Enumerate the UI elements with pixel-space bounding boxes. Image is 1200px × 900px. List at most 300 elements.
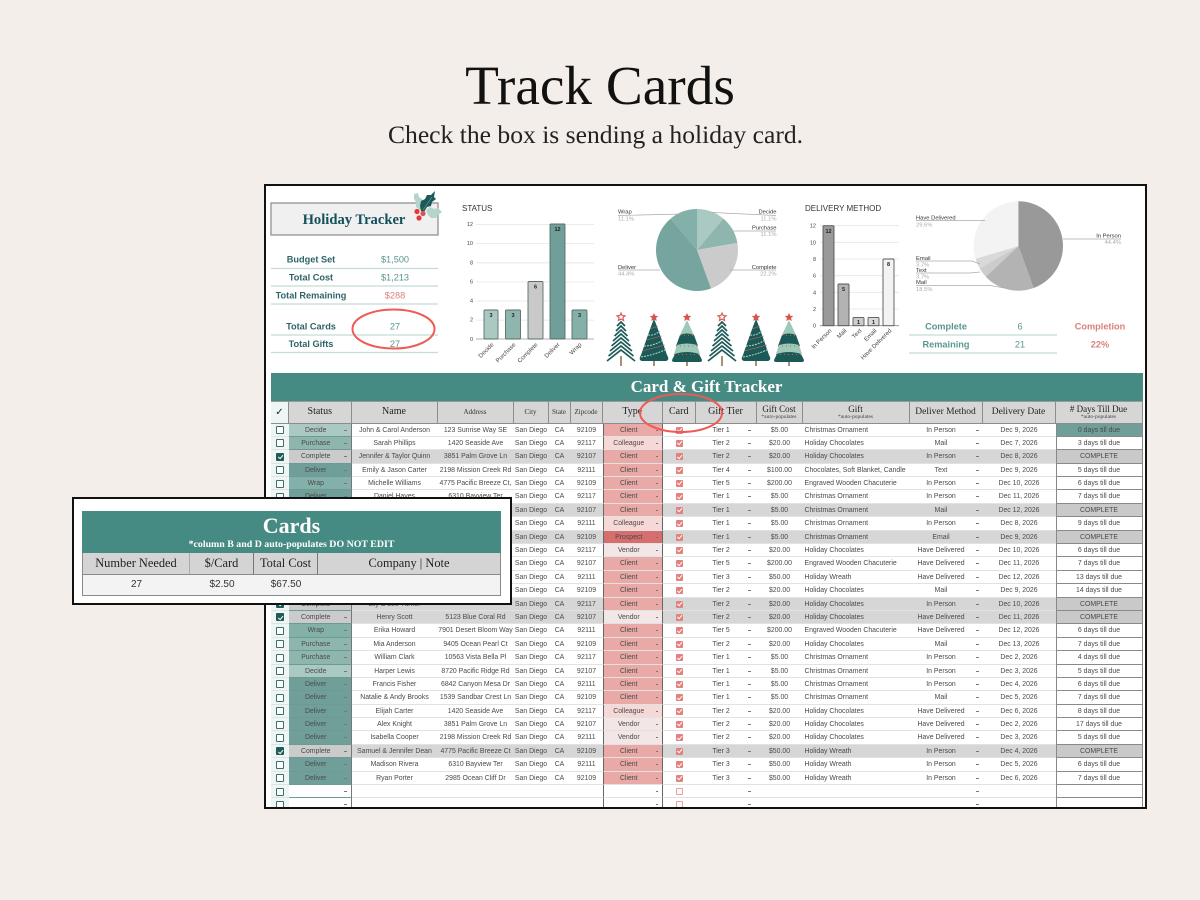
row 17: $20.00 xyxy=(769,641,790,648)
row 25: Dec 4, 2026 xyxy=(1000,748,1038,755)
row 22: 8 days till due xyxy=(1078,708,1120,715)
stats: completion: Remaining xyxy=(923,340,969,350)
row 11: Have Delivered xyxy=(917,560,965,567)
row 5: Wrap xyxy=(308,480,324,487)
row 23: Vendor xyxy=(618,721,640,728)
pie chart: delivery method: 18.5% xyxy=(916,287,932,293)
bar chart: delivery method: 12 xyxy=(810,224,816,230)
row 23 xyxy=(271,718,1143,731)
row 25: In Person xyxy=(926,748,956,755)
row 25: 4775 Pacific Breeze Ct xyxy=(440,748,511,755)
row 8: Colleague xyxy=(613,520,644,527)
row 5: Client xyxy=(620,480,638,487)
cards table xyxy=(82,553,501,596)
pie chart: delivery method: 3.7% xyxy=(916,262,929,268)
bar chart: status: 3 xyxy=(511,313,515,319)
row 11: 92107 xyxy=(577,560,596,567)
row 21: Tier 1 xyxy=(712,694,730,701)
row 20: CA xyxy=(555,681,564,688)
row 26: $50.00 xyxy=(769,761,790,768)
row 14: Tier 2 xyxy=(712,601,730,608)
row 5 xyxy=(271,477,1143,490)
table header: Gift Cost xyxy=(762,404,796,414)
table header: Name xyxy=(382,406,406,417)
row 21: Natalie & Andy Brooks xyxy=(360,694,429,701)
row 15 xyxy=(271,611,1143,624)
row 8: San Diego xyxy=(515,520,547,527)
row 23: CA xyxy=(555,721,564,728)
row 9: Dec 9, 2026 xyxy=(1000,534,1038,541)
row 22: Elijah Carter xyxy=(376,708,413,715)
row 2: Sarah Phillips xyxy=(373,440,416,447)
row 9: CA xyxy=(555,534,564,541)
row 7: Dec 12, 2026 xyxy=(998,507,1040,514)
row 16: 6 days till due xyxy=(1078,627,1120,634)
row 27: 92109 xyxy=(577,775,596,782)
row 22: 1420 Seaside Ave xyxy=(448,708,503,715)
table header: Address xyxy=(464,408,486,416)
summary: budget and totals: $288 xyxy=(385,290,405,300)
row 3: Client xyxy=(620,453,638,460)
row 7: Christmas Ornament xyxy=(804,507,868,514)
row 22: $20.00 xyxy=(769,708,790,715)
row 17: CA xyxy=(555,641,564,648)
row 16: $200.00 xyxy=(767,627,792,634)
row 5: 4775 Pacific Breeze Ct, xyxy=(439,480,512,487)
row 14: Client xyxy=(620,601,638,608)
row 12: San Diego xyxy=(515,574,547,581)
row 18: 4 days till due xyxy=(1078,654,1120,661)
row 27: San Diego xyxy=(515,775,547,782)
row 22: San Diego xyxy=(515,708,547,715)
row 18: Purchase xyxy=(301,654,330,661)
row 3 xyxy=(271,450,1143,464)
row 11: $200.00 xyxy=(767,560,792,567)
row 13 xyxy=(271,584,1143,598)
row 5: Engraved Wooden Chacuterie xyxy=(804,480,897,487)
summary: budget and totals: Total Gifts xyxy=(289,339,333,349)
bar chart: delivery method: Mail xyxy=(836,328,848,340)
row 1: Dec 9, 2026 xyxy=(1000,426,1038,434)
row 13: CA xyxy=(555,587,564,594)
row 14: COMPLETE xyxy=(1080,601,1118,608)
row 9 xyxy=(271,531,1143,544)
row 15: 92107 xyxy=(577,614,596,621)
row 10: CA xyxy=(555,547,564,554)
table header: State xyxy=(552,408,566,416)
row 27: Deliver xyxy=(305,775,326,782)
row 3: Complete xyxy=(301,453,330,460)
row 24: Vendor xyxy=(618,734,640,741)
cards table: $/Card xyxy=(205,556,238,570)
row 6: CA xyxy=(555,493,564,500)
row 21: $5.00 xyxy=(771,694,788,701)
row 5: Tier 5 xyxy=(712,480,730,487)
row 15: CA xyxy=(555,614,564,621)
pie chart: status: Decide xyxy=(758,210,776,216)
bar chart: delivery method: Email xyxy=(864,328,878,343)
bar chart: status: 4 xyxy=(470,298,473,304)
row 25: San Diego xyxy=(515,748,547,755)
table header: Delivery Date xyxy=(992,406,1045,416)
row 20: Deliver xyxy=(305,681,326,688)
row 23: Dec 2, 2026 xyxy=(1000,721,1038,728)
row 10: $20.00 xyxy=(769,547,790,554)
row 15: $20.00 xyxy=(769,614,790,621)
row 16: Client xyxy=(620,627,638,634)
row 19: In Person xyxy=(926,668,956,675)
table header xyxy=(271,401,1143,424)
row 4: Text xyxy=(935,467,947,474)
table header: Zipcode xyxy=(575,408,597,416)
row 6: Tier 1 xyxy=(712,493,730,500)
row 12: Dec 12, 2026 xyxy=(998,574,1040,581)
row 24: Isabella Cooper xyxy=(370,734,419,741)
row 18 xyxy=(271,651,1143,665)
row 2: Tier 2 xyxy=(712,440,730,447)
row 10: Have Delivered xyxy=(917,547,965,554)
row 7: Mail xyxy=(935,507,947,514)
row 19: 8720 Pacific Ridge Rd xyxy=(441,668,510,675)
row 24: Holiday Chocolates xyxy=(804,734,864,741)
row 8: In Person xyxy=(926,520,956,527)
row 15: Complete xyxy=(301,614,330,621)
bar chart: status: Complete xyxy=(517,342,540,365)
table header: Gift Tier xyxy=(708,406,743,417)
row 19: CA xyxy=(555,668,564,675)
row 12: Tier 3 xyxy=(712,574,730,581)
row 5: In Person xyxy=(926,480,956,487)
row 16: Tier 5 xyxy=(712,627,730,634)
row 18: Dec 2, 2026 xyxy=(1000,654,1038,661)
bar chart: delivery method: 1 xyxy=(872,320,875,326)
pie chart: status: Wrap xyxy=(618,210,632,216)
row 5: CA xyxy=(555,480,564,487)
row 22: Dec 6, 2026 xyxy=(1000,708,1038,715)
row 6: Client xyxy=(620,493,638,500)
row 24: 92111 xyxy=(577,734,596,741)
row 21: 92109 xyxy=(577,694,596,701)
row 3: Holiday Chocolates xyxy=(804,453,864,460)
row 5: Michelle Williams xyxy=(368,480,421,487)
row 11: CA xyxy=(555,560,564,567)
row 1: Decide xyxy=(305,426,326,434)
row 25: Samuel & Jennifer Dean xyxy=(357,748,432,755)
row 2: San Diego xyxy=(515,440,547,447)
row 20: Christmas Ornament xyxy=(804,681,868,688)
pie chart: delivery method: In Person xyxy=(1096,234,1121,240)
row 25: Holiday Wreath xyxy=(804,748,851,755)
bar chart: delivery method: 8 xyxy=(887,262,890,268)
row 17: 7 days till due xyxy=(1078,641,1120,648)
row 3: $20.00 xyxy=(769,453,790,460)
row 1: Client xyxy=(620,426,638,434)
row 19: Christmas Ornament xyxy=(804,668,868,675)
pie chart: delivery method: Mail xyxy=(916,280,927,286)
row 4: 92111 xyxy=(577,467,596,474)
row 11: Tier 5 xyxy=(712,560,730,567)
row 8: 9 days till due xyxy=(1078,520,1120,527)
row 19 xyxy=(271,665,1143,678)
bar chart: status: 6 xyxy=(470,280,473,286)
row 26: Dec 5, 2026 xyxy=(1000,761,1038,768)
row 8: Tier 1 xyxy=(712,520,730,527)
row 24: Deliver xyxy=(305,734,326,741)
row 11 xyxy=(271,557,1143,571)
row 6 xyxy=(271,490,1143,504)
row 24: Dec 3, 2026 xyxy=(1000,734,1038,741)
summary: budget and totals: 27 xyxy=(390,339,400,349)
row 18: Tier 1 xyxy=(712,654,730,661)
row 2: Holiday Chocolates xyxy=(804,440,864,447)
row 4: 2198 Mission Creek Rd xyxy=(440,467,511,474)
row 26: CA xyxy=(555,761,564,768)
cards table: 27 xyxy=(131,579,142,590)
row 8: CA xyxy=(555,520,564,527)
row 25 xyxy=(271,745,1143,758)
row 20: Tier 1 xyxy=(712,681,730,688)
row 20: 6842 Canyon Mesa Dr xyxy=(441,681,510,688)
row 14: In Person xyxy=(926,601,956,608)
bar chart: delivery method: 1 xyxy=(857,320,860,326)
row 9: 92109 xyxy=(577,534,596,541)
bar chart: status: 3 xyxy=(489,313,493,319)
stats: completion: 21 xyxy=(1015,340,1025,350)
row 2: Mail xyxy=(935,440,947,447)
table header: Type xyxy=(622,406,642,417)
row 5: Dec 10, 2026 xyxy=(998,480,1040,487)
pie chart: delivery method: Have Delivered xyxy=(916,216,956,222)
bar chart: delivery method: In Person xyxy=(811,328,833,351)
bar chart: status: 6 xyxy=(534,284,537,290)
row 25: Client xyxy=(620,748,638,755)
row 3: In Person xyxy=(926,453,956,460)
row 14: Complete xyxy=(301,601,330,608)
row 25: Complete xyxy=(301,748,330,755)
row 8: Christmas Ornament xyxy=(804,520,868,527)
row 1: Christmas Ornament xyxy=(804,426,868,434)
title: Track Cards xyxy=(465,55,735,116)
bar chart: status: 2 xyxy=(470,318,473,324)
row 9: COMPLETE xyxy=(1080,534,1118,541)
row 15: Tier 2 xyxy=(712,614,730,621)
row 12 xyxy=(271,571,1143,584)
table header: City xyxy=(524,408,537,416)
row 21: Dec 5, 2026 xyxy=(1000,694,1038,701)
row 23: Holiday Chocolates xyxy=(804,721,864,728)
cards heading: Cards xyxy=(263,513,320,538)
row 18: 10563 Vista Bella Pl xyxy=(445,654,506,661)
bar chart: delivery method: 8 xyxy=(813,257,816,263)
row 12: Holiday Wreath xyxy=(804,574,851,581)
row 6: 6310 Bayview Ter xyxy=(448,493,503,500)
row 7: Client xyxy=(620,507,638,514)
row 25: CA xyxy=(555,748,564,755)
summary: budget and totals: Total Cost xyxy=(289,272,333,282)
row 13: San Diego xyxy=(515,587,547,594)
row 3: 3851 Palm Grove Ln xyxy=(444,453,507,460)
table header: *auto-populates xyxy=(1081,414,1116,420)
row 26: Client xyxy=(620,761,638,768)
row 22: 92117 xyxy=(577,708,596,715)
row 19: 92107 xyxy=(577,668,596,675)
row 15: Vendor xyxy=(618,614,640,621)
row 27 xyxy=(271,772,1143,785)
row 15: San Diego xyxy=(515,614,547,621)
row 25: COMPLETE xyxy=(1080,748,1118,755)
row 14: Holiday Chocolates xyxy=(804,601,864,608)
row 18: San Diego xyxy=(515,654,547,661)
row 23: 92107 xyxy=(577,721,596,728)
row 11: Dec 11, 2026 xyxy=(999,560,1039,567)
row 12: 92111 xyxy=(577,574,596,581)
row 17: Mia Anderson xyxy=(373,641,416,648)
row 23: 3851 Palm Grove Ln xyxy=(444,721,507,728)
row 12: 13 days till due xyxy=(1076,574,1122,581)
row 10: 92117 xyxy=(577,547,596,554)
row 16 xyxy=(271,624,1143,638)
row 17: Tier 2 xyxy=(712,641,730,648)
row 17: Holiday Chocolates xyxy=(804,641,864,648)
row 14: $20.00 xyxy=(769,601,790,608)
summary: budget and totals: $1,213 xyxy=(381,272,409,282)
bar chart: delivery method xyxy=(805,204,899,361)
row 23: Deliver xyxy=(305,721,326,728)
row 18: Client xyxy=(620,654,638,661)
row 3: Jennifer & Taylor Quinn xyxy=(359,453,430,460)
row 21: 1539 Sandbar Crest Ln xyxy=(440,694,511,701)
row 2: CA xyxy=(555,440,564,447)
row 19: Dec 3, 2026 xyxy=(1000,668,1038,675)
row 22: Deliver xyxy=(305,708,326,715)
row 3: San Diego xyxy=(515,453,547,460)
table header: Card xyxy=(669,406,688,417)
row 13: 14 days till due xyxy=(1076,587,1122,594)
row 19: Tier 1 xyxy=(712,668,730,675)
row 18: 92117 xyxy=(577,654,596,661)
row 3: Tier 2 xyxy=(712,453,730,460)
row 1: Tier 1 xyxy=(712,426,730,434)
empty row 2 xyxy=(271,798,1143,812)
row 10 xyxy=(271,544,1143,557)
row 13: Dec 9, 2026 xyxy=(1000,587,1038,594)
row 16: Wrap xyxy=(308,627,324,634)
row 15: Have Delivered xyxy=(917,614,965,621)
row 27: Ryan Porter xyxy=(376,775,413,782)
logo: Holiday Tracker xyxy=(271,191,442,235)
row 20: San Diego xyxy=(515,681,547,688)
row 21: 7 days till due xyxy=(1078,694,1120,701)
icon: tree 3 xyxy=(672,313,702,366)
row 1: 92109 xyxy=(577,426,596,434)
row 13: 92109 xyxy=(577,587,596,594)
row 12: $50.00 xyxy=(769,574,790,581)
row 16: 7901 Desert Bloom Way xyxy=(438,627,513,634)
table title: Card & Gift Tracker xyxy=(631,377,782,396)
row 26: San Diego xyxy=(515,761,547,768)
bar chart: status: Deliver xyxy=(544,342,561,360)
row 25: $50.00 xyxy=(769,748,790,755)
summary: budget and totals: Total Cards xyxy=(286,322,336,332)
row 15: 5123 Blue Coral Rd xyxy=(445,614,506,621)
row 21: Deliver xyxy=(305,694,326,701)
row 11: 7 days till due xyxy=(1078,560,1120,567)
summary: budget and totals: Budget Set xyxy=(287,254,335,264)
summary: budget and totals: Total Remaining xyxy=(276,290,346,300)
row 1: San Diego xyxy=(515,426,547,434)
pie chart: status: 44.4% xyxy=(618,272,634,278)
row 4: Deliver xyxy=(305,467,326,474)
pie chart: status: Complete xyxy=(752,265,776,271)
row 17 xyxy=(271,638,1143,651)
row 13: $20.00 xyxy=(769,587,790,594)
summary: budget and totals: 27 xyxy=(390,322,400,332)
row 18: In Person xyxy=(926,654,956,661)
row 4 xyxy=(271,464,1143,477)
row 23: San Diego xyxy=(515,721,547,728)
row 7: Tier 1 xyxy=(712,507,730,514)
table title xyxy=(271,373,1143,401)
row 8 xyxy=(271,517,1143,531)
panel: spreadsheet dashboard xyxy=(264,184,1147,809)
bar chart: status: Purchase xyxy=(495,342,518,364)
pie chart: delivery method: 29.6% xyxy=(916,222,932,228)
table header: *auto-populates xyxy=(761,414,797,420)
row 24 xyxy=(271,731,1143,745)
row 7: $5.00 xyxy=(771,507,788,514)
row 24: San Diego xyxy=(515,734,547,741)
pie chart: status xyxy=(618,209,776,291)
row 3: CA xyxy=(555,453,564,460)
pie chart: status: 11.1% xyxy=(618,216,634,222)
row 1 xyxy=(271,424,1143,437)
row 1: In Person xyxy=(926,426,956,434)
pie chart: delivery method: 3.7% xyxy=(916,274,929,280)
row 17: Purchase xyxy=(301,641,330,648)
row 9: San Diego xyxy=(515,534,547,541)
row 8: $5.00 xyxy=(771,520,788,527)
row 3: 92107 xyxy=(577,453,596,460)
row 8: 92111 xyxy=(577,520,596,527)
table header: # Days Till Due xyxy=(1070,404,1127,414)
row 14: Lily & Lee Turner xyxy=(368,601,421,608)
row 1: CA xyxy=(555,426,564,434)
row 23: Tier 2 xyxy=(712,721,730,728)
cards table: Company | Note xyxy=(369,556,449,570)
row 22: CA xyxy=(555,708,564,715)
row 4: CA xyxy=(555,467,564,474)
row 17: Client xyxy=(620,641,638,648)
row 4: 5 days till due xyxy=(1078,467,1120,474)
table header: Status xyxy=(308,406,332,417)
row 21: Client xyxy=(620,694,638,701)
callout: circle around card column xyxy=(639,393,723,433)
row 23: 17 days till due xyxy=(1076,721,1122,728)
row 23: $20.00 xyxy=(769,721,790,728)
row 2: 92117 xyxy=(577,440,596,447)
row 9: Prospect xyxy=(615,534,642,541)
row 5: 92109 xyxy=(577,480,596,487)
row 6: $5.00 xyxy=(771,493,788,500)
icon: tree 4 xyxy=(708,313,736,366)
row 9: Email xyxy=(932,534,950,541)
row 7: CA xyxy=(555,507,564,514)
row 15: Henry Scott xyxy=(376,614,412,621)
row 24: 5 days till due xyxy=(1078,734,1120,741)
row 4: Chocolates, Soft Blanket, Candle xyxy=(804,467,906,474)
row 2: Dec 7, 2026 xyxy=(1000,440,1038,447)
row 20 xyxy=(271,678,1143,691)
